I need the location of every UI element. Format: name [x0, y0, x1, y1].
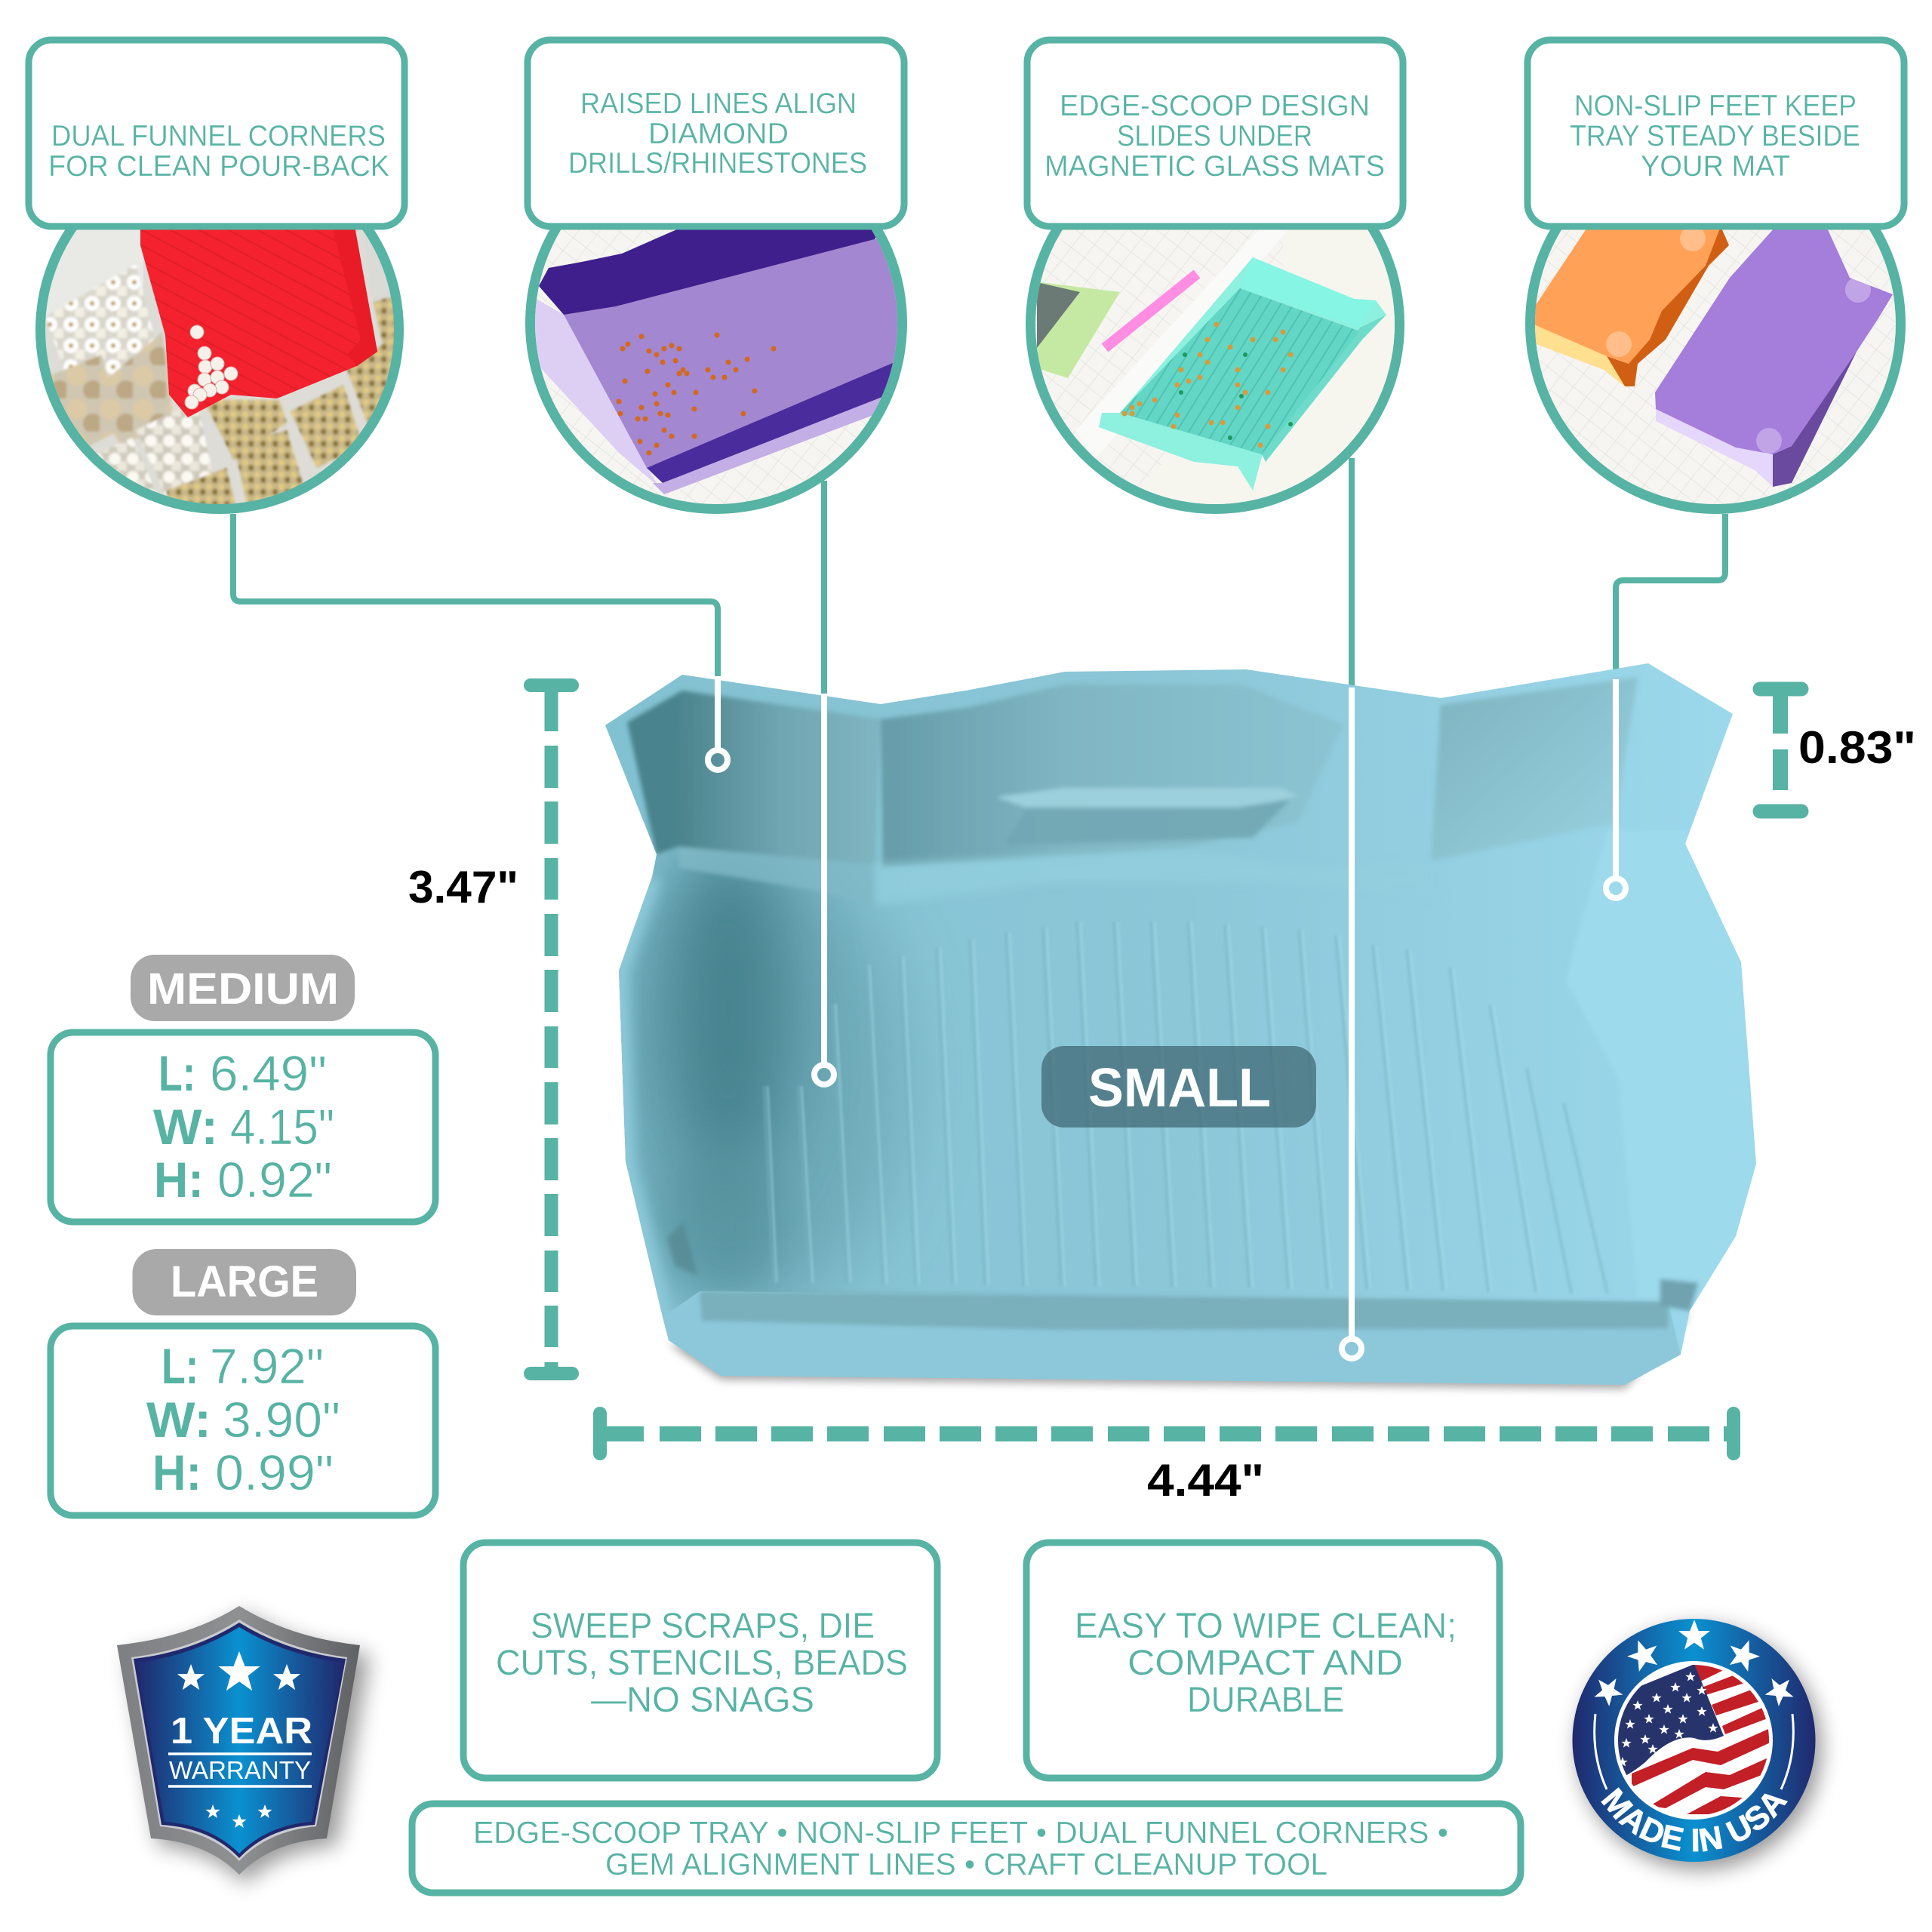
dimension: width 4.44 — [600, 1414, 1734, 1506]
dimension: height 3.47: 3.47" — [408, 862, 518, 912]
size box: large dimensions: H: — [152, 1444, 202, 1500]
size box: medium dimensions: H: — [154, 1152, 204, 1208]
photo circle: purple tray with drills — [525, 229, 907, 514]
size label: medium: MEDIUM — [147, 964, 339, 1014]
feature box: edge scoop: MAGNETIC GLASS MATS — [1044, 150, 1385, 183]
dimension: height 3.47 — [408, 685, 572, 1374]
size box: medium dimensions: 4.15" — [230, 1099, 334, 1155]
feature box: easy to wipe: EASY TO WIPE CLEAN; — [1075, 1605, 1457, 1645]
size label: large: LARGE — [171, 1257, 318, 1306]
flag — [1618, 1665, 1769, 1814]
size box: large dimensions: L: — [162, 1338, 198, 1394]
size box: medium dimensions: L: — [158, 1045, 195, 1101]
feature box: easy to wipe: DURABLE — [1187, 1679, 1344, 1719]
connector: edge scoop — [1349, 458, 1355, 691]
feature box: non-slip feet — [1527, 40, 1904, 226]
connector: non-slip feet — [1616, 514, 1725, 681]
dimension: depth 0.83: 0.83" — [1798, 722, 1916, 773]
feature box: sweep scraps: SWEEP SCRAPS, DIE — [531, 1605, 875, 1645]
badge: 1 year warranty shield: WARRANTY — [169, 1756, 311, 1784]
size box: large dimensions: W: — [146, 1392, 211, 1447]
size label: large — [133, 1249, 356, 1315]
dimension: width 4.44: 4.44" — [1147, 1455, 1264, 1506]
photo circle: foam non-slip feet — [1525, 229, 1906, 514]
feature box: easy to wipe: COMPACT AND — [1128, 1642, 1403, 1682]
size box: medium dimensions: 6.49" — [210, 1045, 327, 1101]
feature box: non-slip feet: YOUR MAT — [1641, 150, 1790, 183]
feature box: non-slip feet: NON-SLIP FEET KEEP — [1574, 90, 1857, 122]
size box: medium dimensions — [51, 1032, 435, 1222]
feature box: dual funnel corners: FOR CLEAN POUR-BACK — [48, 150, 389, 183]
size box: medium dimensions: 0.92" — [217, 1152, 332, 1208]
connector: funnel corners — [233, 514, 718, 679]
size box: large dimensions — [51, 1326, 435, 1515]
feature box: raised lines: DIAMOND — [648, 118, 789, 150]
summary box: feature list: GEM ALIGNMENT LINES • CRAFT CLEANUP TOOL — [605, 1847, 1327, 1881]
badge: 1 year warranty shield — [117, 1606, 370, 1884]
feature box: sweep scraps: —NO SNAGS — [591, 1679, 814, 1719]
size label: small — [1041, 1046, 1316, 1128]
feature box: dual funnel corners: DUAL FUNNEL CORNERS — [51, 120, 386, 152]
badge: 1 year warranty shield: 1 YEAR — [171, 1711, 312, 1752]
size label: small: SMALL — [1088, 1058, 1271, 1118]
size box: medium dimensions: W: — [153, 1099, 218, 1155]
size box: large dimensions: 7.92" — [210, 1338, 324, 1394]
connector: raised lines — [821, 481, 827, 696]
feature box: non-slip feet: TRAY STEADY BESIDE — [1570, 120, 1860, 152]
summary box: feature list: EDGE-SCOOP TRAY • NON-SLIP FEET • DUAL FUNNEL CORNERS • — [473, 1815, 1448, 1850]
feature box: easy to wipe — [1026, 1543, 1500, 1778]
dimension: depth 0.83 — [1760, 689, 1916, 811]
size label: medium — [131, 955, 355, 1021]
summary box: feature list — [412, 1804, 1521, 1893]
photo circle: aqua tray on glass mat — [1026, 229, 1404, 514]
feature box: raised lines: RAISED LINES ALIGN — [580, 88, 857, 120]
feature box: edge scoop: SLIDES UNDER — [1117, 120, 1312, 152]
feature box: raised lines: DRILLS/RHINESTONES — [568, 147, 867, 180]
feature box: sweep scraps: CUTS, STENCILS, BEADS — [496, 1642, 908, 1682]
photo circle: red tray with beads — [35, 229, 404, 514]
feature box: edge scoop: EDGE-SCOOP DESIGN — [1060, 90, 1370, 122]
feature box: sweep scraps — [463, 1543, 937, 1778]
callout pointers on tray — [708, 676, 1626, 1358]
feature box: raised lines — [528, 40, 904, 226]
feature box: dual funnel corners — [29, 40, 405, 226]
size box: large dimensions: 3.90" — [223, 1392, 340, 1447]
badge: made in USA seal — [1564, 1613, 1835, 1883]
badge: made in USA seal: MADE IN USA — [1601, 1787, 1788, 1852]
size box: large dimensions: 0.99" — [215, 1444, 334, 1500]
tray: small size product view — [604, 663, 1758, 1389]
feature box: edge scoop — [1027, 40, 1403, 226]
